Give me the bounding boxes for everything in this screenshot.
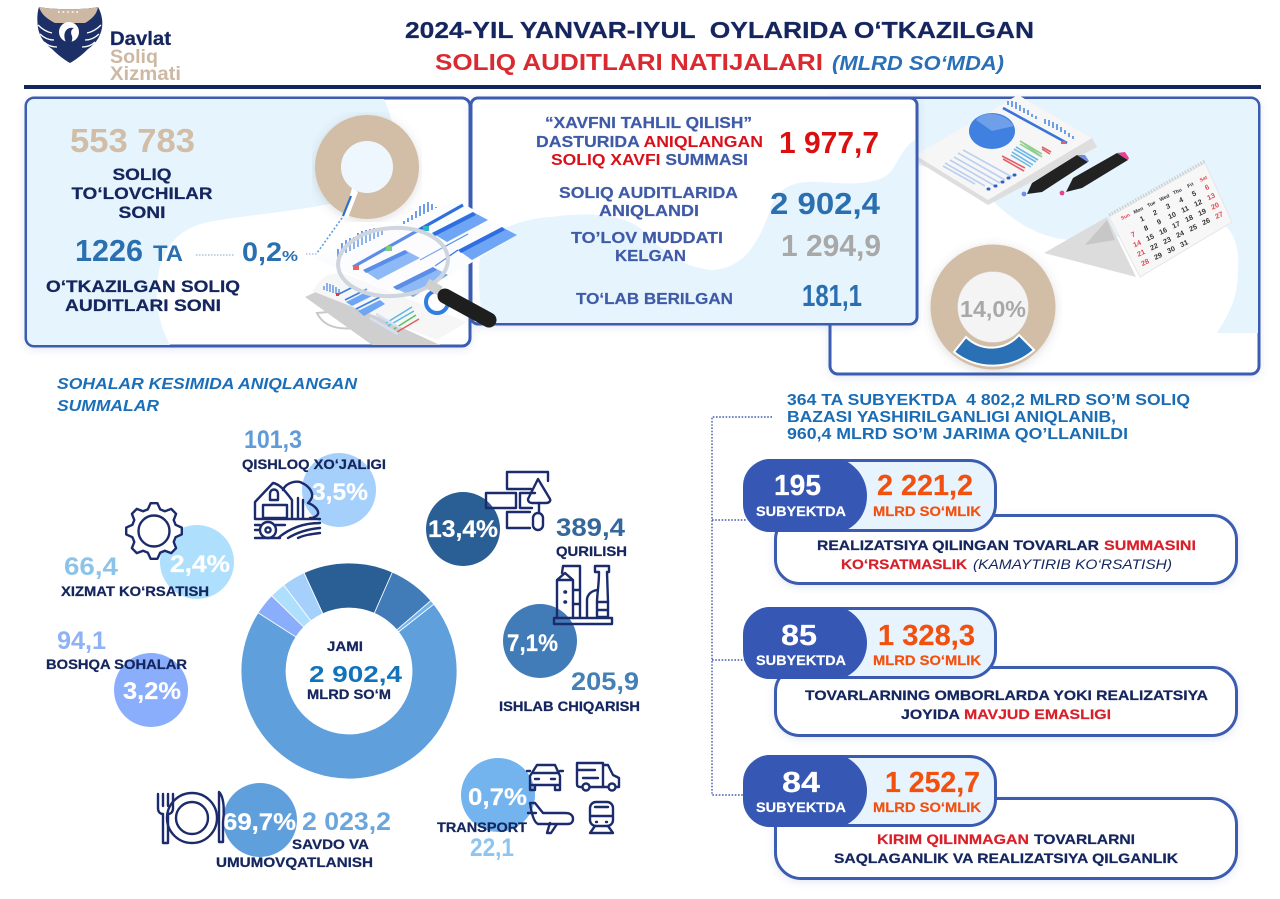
icon: gear xyxy=(126,503,182,559)
icon: desk calendar: 22 xyxy=(1149,242,1159,252)
sector: qurilish: 389,4 xyxy=(556,514,625,542)
icon: plate with fork and knife xyxy=(158,792,224,843)
stat: audits: 1226 xyxy=(75,233,143,268)
card: 84 subyekt: SUBYEKTDA xyxy=(756,800,846,815)
sector: boshqa sohalar: 94,1 xyxy=(57,627,106,655)
icon: desk calendar: 24 xyxy=(1175,229,1185,240)
card: 85 subyekt: JOYIDA xyxy=(901,706,960,722)
sector: savdo va umumovqatlanish: 69,7% xyxy=(223,809,296,836)
icon: desk calendar: 11 xyxy=(1180,204,1190,215)
title: 2024-YIL YANVAR-IYUL OYLARIDA O‘TKAZILGAN xyxy=(405,17,1034,43)
icon: desk calendar: 7 xyxy=(1130,230,1137,239)
icon: desk calendar: 12 xyxy=(1193,198,1203,209)
logo: Soliq xyxy=(110,47,158,68)
callout: hidden tax base xyxy=(787,392,1190,443)
icon: desk calendar: Thu xyxy=(1172,187,1183,197)
section heading: by sector: SOHALAR KESIMIDA ANIQLANGAN xyxy=(57,376,358,393)
card: 195 subyekt: (KAMAYTIRIB KO‘RSATISH) xyxy=(973,556,1172,572)
metric: risk amount: DASTURIDA ANIQLANGAN xyxy=(536,134,763,151)
icon: desk calendar: 8 xyxy=(1143,224,1150,233)
sector: boshqa sohalar: BOSHQA SOHALAR xyxy=(46,657,187,672)
upper report sheet xyxy=(313,200,517,300)
callout: hidden tax base: 364 TA SUBYEKTDA 4 802,2 MLRD SO’M SOLIQ xyxy=(787,392,1190,409)
metric: paid: 181,1 xyxy=(802,278,862,313)
icon: desk calendar: Tue xyxy=(1147,200,1157,209)
metric: risk amount: 1 977,7 xyxy=(779,125,879,160)
icon: desk calendar: 27 xyxy=(1214,210,1224,221)
metric: risk amount xyxy=(536,115,879,169)
icon: desk calendar: 16 xyxy=(1158,226,1168,237)
lower report sheet xyxy=(305,274,467,345)
donut chart 14,0%: 14,0% xyxy=(960,296,1026,322)
icon: van xyxy=(577,763,619,790)
stat: audits: AUDITLARI SONI xyxy=(65,296,221,315)
panel: taxpayers and audits xyxy=(26,98,470,346)
icon: train xyxy=(590,802,613,833)
card: 84 subyekt: SAQLAGANLIK VA REALIZATSIYA QILGANLIK xyxy=(834,850,1178,866)
stat: audits xyxy=(46,233,298,315)
logo emblem xyxy=(37,7,102,63)
icon: desk calendar: Mon xyxy=(1133,206,1144,216)
sector: xizmat ko'rsatish: 2,4% xyxy=(170,551,230,578)
stat: taxpayers: TO‘LOVCHILAR xyxy=(72,184,212,203)
logo: Xizmati xyxy=(110,64,181,85)
card: 84 subyekt: MLRD SO‘MLIK xyxy=(873,800,981,815)
sector: savdo va umumovqatlanish: 2 023,2 xyxy=(302,808,391,836)
card: 195 subyekt: SUMMASINI xyxy=(1104,537,1196,553)
illustration: tan ring with magnifier over reports xyxy=(305,128,517,345)
icon: desk calendar: 28 xyxy=(1140,257,1150,268)
card: 84 subyekt: 1 252,7 xyxy=(885,767,980,799)
icon: plane xyxy=(528,803,573,833)
icon: desk calendar: 21 xyxy=(1136,248,1146,259)
metric: payment due: KELGAN xyxy=(615,248,686,265)
sector: xizmat ko'rsatish: 66,4 xyxy=(64,553,118,581)
icon: report document with chart xyxy=(915,95,1129,205)
sector: xizmat ko'rsatish xyxy=(61,503,234,599)
icon: desk calendar: Fri xyxy=(1187,181,1195,190)
title: (MLRD SO‘MDA) xyxy=(832,53,1004,75)
icon: desk calendar: 15 xyxy=(1145,232,1155,243)
sector: savdo va umumovqatlanish: UMUMOVQATLANISH xyxy=(216,855,373,870)
metric: identified in audits: ANIQLANDI xyxy=(599,203,699,220)
logo: Davlat xyxy=(110,29,172,50)
icon: desk calendar: 1 xyxy=(1139,215,1146,224)
donut chart 14,0% xyxy=(944,258,1042,366)
donut chart: sectors xyxy=(241,563,457,779)
metric: identified in audits: SOLIQ AUDITLARIDA xyxy=(559,185,738,202)
stat: taxpayers: SONI xyxy=(118,203,166,222)
metric: risk amount: “XAVFNI TAHLIL QILISH” xyxy=(545,115,752,132)
sector: transport: 22,1 xyxy=(470,834,514,862)
icon: desk calendar: 20 xyxy=(1210,201,1220,212)
sector: qishloq xo'jaligi: 101,3 xyxy=(244,426,302,454)
sector: xizmat ko'rsatish: XIZMAT KO‘RSATISH xyxy=(61,584,209,599)
stat: audits: % xyxy=(282,248,298,265)
card: 195 subyekt: 2 221,2 xyxy=(877,470,973,502)
card: 85 subyekt xyxy=(743,607,1236,736)
donut centre total: MLRD SO‘M xyxy=(307,686,391,702)
card: 195 subyekt: MLRD SO‘MLIK xyxy=(873,504,981,519)
card: 195 subyekt: SUBYEKTDA xyxy=(756,504,846,519)
callout: hidden tax base: 960,4 MLRD SO’M JARIMA QO’LLANILDI xyxy=(787,426,1128,443)
donut centre total xyxy=(307,639,402,702)
section heading: by sector xyxy=(57,376,358,415)
sector: qishloq xo'jaligi: 3,5% xyxy=(312,479,368,506)
icon: marker pens xyxy=(1022,152,1129,196)
metric: risk amount: SOLIQ XAVFI SUMMASI xyxy=(551,152,748,169)
icon: desk calendar: 3 xyxy=(1165,202,1172,211)
stat: audits: O‘TKAZILGAN SOLIQ xyxy=(46,277,240,296)
icon: factory xyxy=(554,566,612,624)
sector: qishloq xo'jaligi xyxy=(242,426,386,538)
icon: desk calendar: Wed xyxy=(1159,193,1170,203)
card: 85 subyekt: MAVJUD EMASLIGI xyxy=(964,706,1111,722)
card: 85 subyekt: SUBYEKTDA xyxy=(756,653,846,668)
card: 195 subyekt xyxy=(743,459,1236,584)
sector: transport: TRANSPORT xyxy=(437,820,528,835)
icon: desk calendar: Sat xyxy=(1199,175,1209,184)
sector: transport xyxy=(437,758,619,862)
icon: desk calendar: 13 xyxy=(1206,192,1216,202)
icon: desk calendar: 29 xyxy=(1153,251,1163,262)
icon: desk calendar: 18 xyxy=(1184,213,1194,224)
icon: desk calendar: 10 xyxy=(1167,210,1177,221)
card: 195 subyekt: REALIZATSIYA QILINGAN TOVARLAR xyxy=(817,537,1099,553)
metric: payment due xyxy=(571,228,881,265)
icon: magnifier xyxy=(336,224,489,320)
stat: taxpayers xyxy=(70,122,212,222)
section heading: by sector: SUMMALAR xyxy=(57,398,160,415)
icon: desk calendar: 26 xyxy=(1201,216,1211,227)
icon: desk calendar: 6 xyxy=(1204,183,1211,192)
donut centre total: 2 902,4 xyxy=(309,661,402,687)
metric: identified in audits xyxy=(559,185,881,221)
icon: desk calendar: 30 xyxy=(1166,245,1176,255)
metric: payment due: TO’LOV MUDDATI xyxy=(571,230,723,247)
metric: payment due: 1 294,9 xyxy=(781,228,881,263)
sector: transport: 0,7% xyxy=(468,784,527,811)
panel: audit results xyxy=(471,98,917,324)
card: 85 subyekt: 85 xyxy=(781,620,817,652)
sector: qurilish: QURILISH xyxy=(556,544,627,559)
card: 84 subyekt: KIRIM QILINMAGAN xyxy=(877,831,1029,847)
card: 85 subyekt: 1 328,3 xyxy=(878,620,975,652)
logo xyxy=(37,7,181,85)
sector: savdo va umumovqatlanish xyxy=(158,783,391,870)
card: 84 subyekt xyxy=(743,755,1236,878)
card: 84 subyekt: TOVARLARNI xyxy=(1034,831,1135,847)
stat: taxpayers: 553 783 xyxy=(70,122,195,159)
icon: desk calendar: 25 xyxy=(1188,223,1198,234)
metric: paid: TO‘LAB BERILGAN xyxy=(576,291,733,308)
donut centre total: JAMI xyxy=(327,639,363,654)
sector: ishlab chiqarish: ISHLAB CHIQARISH xyxy=(499,699,640,714)
sector: qurilish: 13,4% xyxy=(428,516,498,543)
sector: ishlab chiqarish: 7,1% xyxy=(507,630,558,657)
card: 85 subyekt: TOVARLARNING OMBORLARDA YOKI REALIZATSIYA xyxy=(805,687,1208,703)
card: 195 subyekt: 195 xyxy=(774,470,821,502)
sector: qishloq xo'jaligi: QISHLOQ XO‘JALIGI xyxy=(242,457,386,472)
icon: bricks and trowel xyxy=(486,472,550,530)
stat: taxpayers: SOLIQ xyxy=(112,165,172,184)
card: 85 subyekt: MLRD SO‘MLIK xyxy=(873,653,981,668)
sector: ishlab chiqarish: 205,9 xyxy=(571,668,639,696)
metric: identified in audits: 2 902,4 xyxy=(770,186,881,221)
icon: desk calendar: Sun xyxy=(1120,212,1131,222)
icon: car xyxy=(527,765,563,790)
icon: desk calendar: 2 xyxy=(1152,208,1159,217)
card: 195 subyekt: KO‘RSATMASLIK xyxy=(841,556,967,572)
metric: paid xyxy=(576,278,862,313)
donut ring xyxy=(306,128,406,254)
sector: boshqa sohalar xyxy=(46,627,188,727)
stat: audits: 0,2 xyxy=(242,237,282,267)
icon: desk calendar: 9 xyxy=(1156,218,1163,227)
icon: desk calendar: 19 xyxy=(1197,207,1207,218)
title: SOLIQ AUDITLARI NATIJALARI xyxy=(435,49,823,75)
sector: ishlab chiqarish xyxy=(499,566,640,714)
card: 84 subyekt: 84 xyxy=(782,767,820,799)
title xyxy=(405,17,1034,75)
icon: desk calendar: 17 xyxy=(1171,220,1181,231)
stat: audits: TA xyxy=(153,241,183,266)
icon: farm xyxy=(255,482,320,538)
icon: desk calendar xyxy=(1044,161,1232,277)
sector: boshqa sohalar: 3,2% xyxy=(123,678,181,705)
icon: desk calendar: 14 xyxy=(1132,239,1142,249)
sector: savdo va umumovqatlanish: SAVDO VA xyxy=(292,837,369,852)
sector: qurilish xyxy=(426,472,627,566)
callout: hidden tax base: BAZASI YASHIRILGANLIGI ANIQLANIB, xyxy=(787,409,1116,426)
icon: desk calendar: 4 xyxy=(1178,196,1185,205)
icon: desk calendar: 23 xyxy=(1162,235,1172,246)
icon: desk calendar: 5 xyxy=(1191,189,1198,198)
icon: desk calendar: 31 xyxy=(1179,238,1189,249)
panel: right illustration xyxy=(830,95,1259,374)
